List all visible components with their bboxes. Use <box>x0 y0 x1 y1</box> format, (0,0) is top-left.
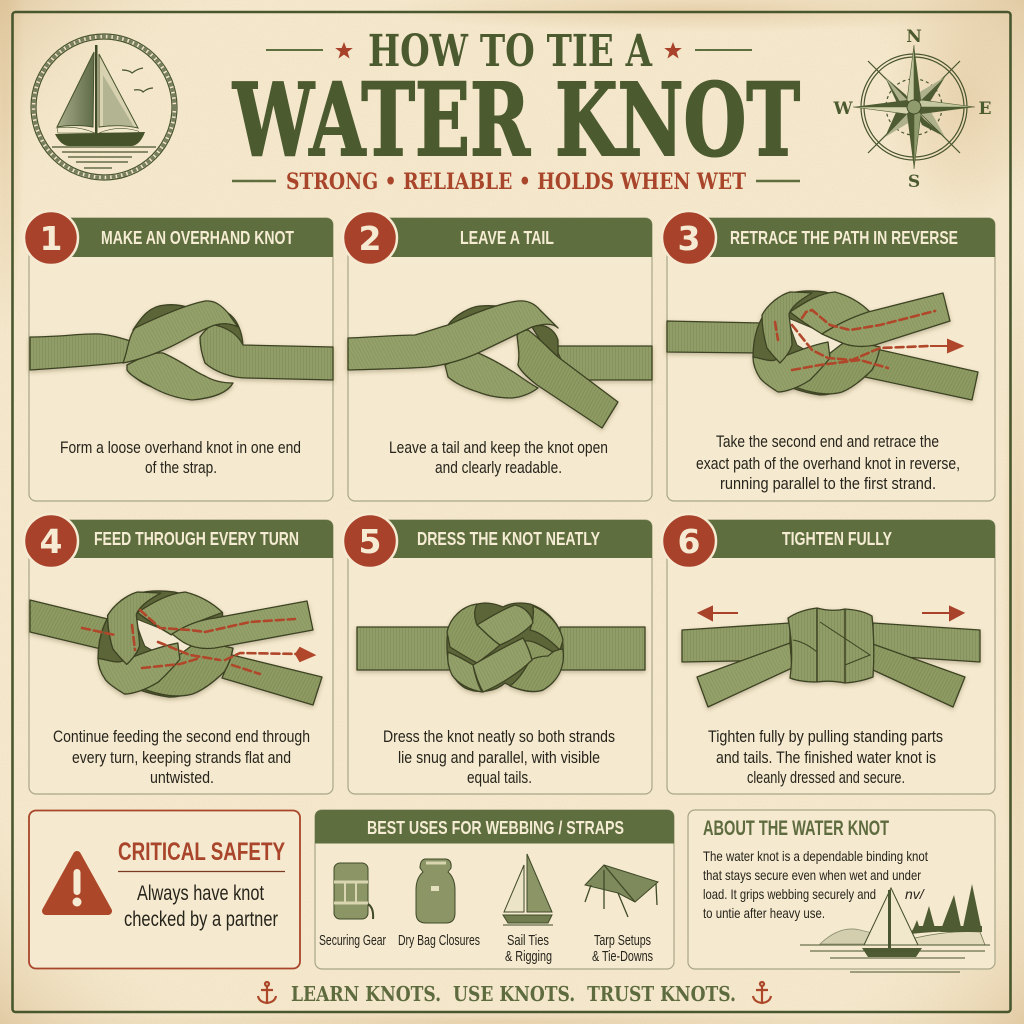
panel: best uses: & Rigging <box>505 949 552 965</box>
panel: critical safety: CRITICAL SAFETY <box>118 838 285 866</box>
knot illustration 3 <box>667 291 978 400</box>
panel: about the water knot: to untie after heavy use. <box>703 905 825 921</box>
stars <box>335 42 682 58</box>
panel: step 6: cleanly dressed and secure. <box>747 769 905 787</box>
panel: step 5: equal tails. <box>467 769 532 787</box>
panel: critical safety <box>29 810 300 968</box>
icon: compass rose: S <box>908 172 920 192</box>
icon: tarp tent <box>585 865 658 917</box>
icon: anchor right <box>753 982 771 1003</box>
panel: step 3: exact path of the overhand knot in reverse, <box>696 455 960 473</box>
panel: step 6: Tighten fully by pulling standing parts <box>708 728 943 746</box>
panel: about the water knot <box>688 810 995 972</box>
panel: step 2 <box>343 211 652 501</box>
panel: step 5: DRESS THE KNOT NEATLY <box>417 529 600 549</box>
panel: step 4: untwisted. <box>150 769 214 787</box>
knot illustration 4 <box>30 591 322 705</box>
panel: best uses <box>315 810 674 969</box>
panel: critical safety: checked by a partner <box>124 908 278 931</box>
knot illustration 6 <box>682 608 980 707</box>
knot illustration 5 <box>357 603 645 692</box>
panel: best uses: BEST USES FOR WEBBING / STRAPS <box>367 818 624 838</box>
panel: step 3: Take the second end and retrace the <box>716 433 939 451</box>
panel: about the water knot: nv/ <box>905 886 926 902</box>
panel: step 4: FEED THROUGH EVERY TURN <box>94 529 299 549</box>
panel: step 2: and clearly readable. <box>435 459 562 477</box>
icon: dry bag <box>416 859 455 923</box>
panel: step 5: Dress the knot neatly so both strands <box>383 728 615 746</box>
route arrows 3 <box>775 310 962 370</box>
panel: step 1 <box>24 211 333 501</box>
panel: step 3: RETRACE THE PATH IN REVERSE <box>730 228 958 248</box>
illustration: boat and forest <box>800 884 990 972</box>
panel: step 5: lie snug and parallel, with visible <box>398 749 600 767</box>
panel: step 6: 6 <box>678 522 700 561</box>
panel: best uses: Dry Bag Closures <box>398 933 480 949</box>
panel: step 4: Continue feeding the second end through <box>53 728 310 746</box>
icon: anchor left <box>258 982 276 1003</box>
panel: step 5 <box>343 514 652 794</box>
arrow: pull right <box>922 607 963 620</box>
panel: step 2: Leave a tail and keep the knot open <box>389 439 608 457</box>
panel: about the water knot: The water knot is a dependable binding knot <box>703 848 928 864</box>
panel: step 6: and tails. The finished water knot is <box>716 749 936 767</box>
panel: step 4: every turn, keeping strands flat and <box>72 749 291 767</box>
icon: warning triangle <box>46 855 108 911</box>
panel: best uses: & Tie-Downs <box>592 949 653 965</box>
panel: step 3: 3 <box>678 219 700 258</box>
panel: step 1: Form a loose overhand knot in one end <box>60 439 301 457</box>
knot illustration 1 <box>30 301 333 400</box>
panel: best uses: Sail Ties <box>507 933 549 949</box>
icon: compass rose: N <box>906 27 922 47</box>
panel: step 6: TIGHTEN FULLY <box>782 529 892 549</box>
panel: about the water knot: ABOUT THE WATER KNOT <box>703 817 889 840</box>
subtitle: STRONG • RELIABLE • HOLDS WHEN WET <box>286 169 747 195</box>
panel: step 1: of the strap. <box>145 459 217 477</box>
arrow: pull left <box>699 607 738 620</box>
panel: step 6 <box>662 514 995 794</box>
icon: compass rose: W <box>832 99 853 119</box>
panel: step 4 <box>24 514 333 794</box>
panel: step 5: 5 <box>359 522 381 561</box>
emblem: sailboat in rope circle <box>31 34 177 180</box>
icon: compass rose: E <box>979 99 992 119</box>
panel: best uses: Securing Gear <box>319 933 386 949</box>
knot illustration 2 <box>348 301 652 428</box>
panel: step 1: MAKE AN OVERHAND KNOT <box>101 228 294 248</box>
panel: step 2: LEAVE A TAIL <box>460 228 554 248</box>
footer tagline: LEARN KNOTS. USE KNOTS. TRUST KNOTS. <box>291 982 736 1006</box>
panel: step 2: 2 <box>359 219 381 258</box>
panel: about the water knot: that stays secure even when wet and under <box>703 867 921 883</box>
panel: critical safety: Always have knot <box>137 882 264 905</box>
panel: best uses: Tarp Setups <box>594 933 651 949</box>
route arrows 4 <box>82 610 314 674</box>
kicker line: HOW TO TIE A <box>368 26 653 77</box>
panel: step 1: 1 <box>40 219 62 258</box>
panel: step 4: 4 <box>40 522 62 561</box>
panel: step 3 <box>662 211 995 501</box>
icon: compass rose <box>832 27 992 192</box>
panel: about the water knot: load. It grips webbing securely and <box>703 886 876 902</box>
main title: WATER KNOT <box>232 61 800 179</box>
icon: securing gear <box>334 863 373 919</box>
icon: sailboat <box>503 854 553 925</box>
panel: step 3: running parallel to the first strand. <box>720 475 936 493</box>
